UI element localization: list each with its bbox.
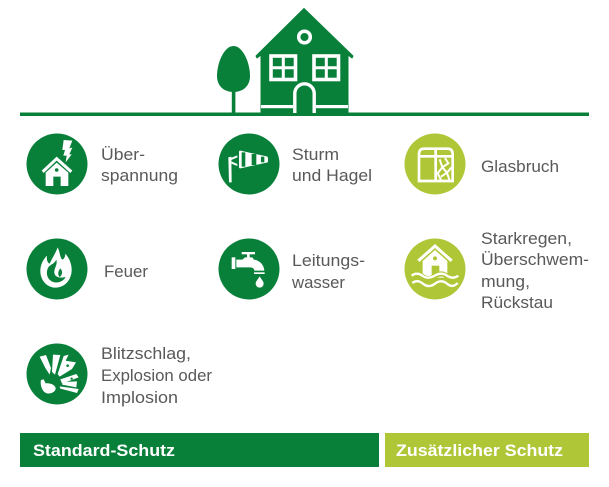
legend bar: Standard-Schutz [20,433,379,467]
icon: windsock [218,134,280,194]
label: Blitzschlag, [101,344,191,363]
icon: flame [26,238,88,300]
label: Sturm [292,145,339,164]
legend bar: Standard-Schutz: Standard-Schutz [33,442,175,460]
icon: house with lightning [26,134,88,194]
item: Starkregen, Überschwemmung, Rückstau: Rückstau [481,293,553,312]
icon: explosion [26,344,88,404]
item: Leitungswasser: wasser [291,273,345,292]
icon: broken window [404,134,466,194]
item: Starkregen, Überschwemmung, Rückstau: mung, [481,272,530,291]
item: Leitungswasser [218,238,365,300]
icon: flooded house [404,238,466,300]
item: Blitzschlag, Explosion oder Implosion: Implosion [101,388,178,407]
label: Feuer [104,262,148,281]
icon: water tap [218,238,280,300]
label: Leitungs- [292,251,365,270]
item: Überspannung: spannung [101,166,178,185]
item: Blitzschlag, Explosion oder Implosion [26,344,212,407]
item: Feuer [26,238,148,300]
ground line [20,112,589,116]
item: Blitzschlag, Explosion oder Implosion: Explosion oder [101,366,212,385]
legend bar: Zusätzlicher Schutz: Zusätzlicher Schutz [396,442,563,460]
illustration: house and tree on ground line [20,8,589,116]
item: Sturm und Hagel [218,134,372,194]
label: Über- [101,145,145,164]
icon: house [256,8,353,113]
item: Starkregen, Überschwemmung, Rückstau [404,229,589,312]
item: Starkregen, Überschwemmung, Rückstau: Überschwem- [481,250,589,269]
label: Starkregen, [481,229,572,248]
label: Glasbruch [481,157,559,176]
item: Sturm und Hagel: und Hagel [292,166,372,185]
legend bar: Zusätzlicher Schutz [385,433,589,467]
item: Glasbruch [404,134,559,194]
item: Überspannung [26,134,178,194]
icon: tree [217,46,250,114]
